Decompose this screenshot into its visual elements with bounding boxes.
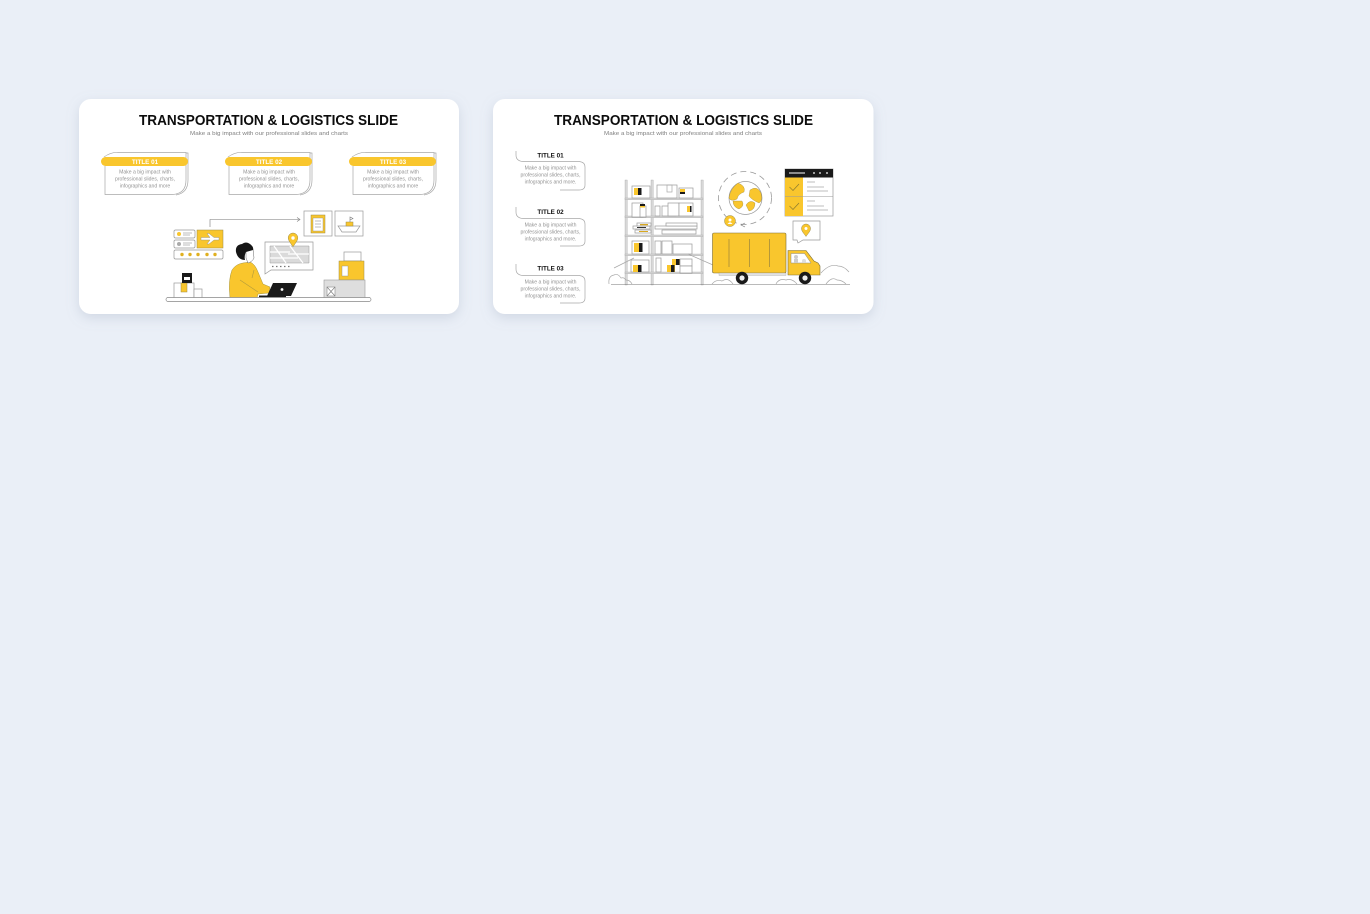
warehouse shelves: [625, 180, 703, 285]
item: title 01: [516, 151, 585, 190]
panel: slide 2: [493, 99, 874, 314]
card: title 02: Make a big impact with: [243, 170, 295, 176]
ground and bushes: [609, 254, 850, 284]
globe: [718, 172, 772, 224]
icon: user badge: [724, 216, 745, 227]
card: title 03: Make a big impact with: [367, 170, 419, 176]
laptop: [259, 283, 297, 297]
heading: slide 1 title: TRANSPORTATION & LOGISTICS SLIDE: [139, 113, 398, 129]
card: title 03: infographics and more: [368, 184, 418, 190]
arrow: connector to documents: [210, 218, 300, 227]
card: title 01: [101, 152, 188, 195]
icon: cargo ship: [335, 211, 363, 236]
item: title 03: TITLE 03: [537, 266, 564, 272]
item: title 01: TITLE 01: [537, 152, 564, 160]
item: title 02: [516, 207, 585, 246]
illustration: person at desk with logistics icons: [166, 211, 371, 302]
card: title 01: professional slides, charts,: [115, 176, 175, 182]
icon: airplane tile: [197, 230, 223, 248]
card: title 03: professional slides, charts,: [363, 176, 423, 182]
shelf boxes: [631, 185, 697, 273]
card: title 01: Make a big impact with: [119, 170, 171, 176]
icon: location pin: [288, 233, 298, 247]
item: title 03: [516, 264, 585, 303]
card: title 02: TITLE 02: [256, 159, 283, 166]
item: title 01: infographics and more.: [525, 180, 576, 186]
shelf frame: [625, 180, 703, 285]
card: title 01: infographics and more: [120, 184, 170, 190]
checklist window: [785, 169, 833, 216]
icon: clipboard: [304, 211, 332, 236]
item: title 02: Make a big impact with: [525, 222, 577, 228]
item: title 02: professional slides, charts,: [520, 230, 581, 236]
slide 2 subtitle: Make a big impact with our professional slides and charts: [604, 131, 762, 137]
card: title 01: TITLE 01: [132, 159, 159, 166]
delivery truck: [712, 233, 820, 284]
item: title 03: infographics and more.: [525, 294, 576, 300]
heading: slide 2 title: TRANSPORTATION & LOGISTICS SLIDE: [554, 113, 813, 129]
item: title 03: professional slides, charts,: [520, 286, 581, 292]
person: [229, 242, 270, 298]
slide 1 subtitle: Make a big impact with our professional slides and charts: [190, 131, 348, 137]
item: title 02: TITLE 02: [537, 209, 564, 216]
item: title 02: infographics and more.: [525, 236, 576, 242]
item: title 03: Make a big impact with: [525, 280, 577, 286]
form: list rows: [174, 230, 223, 259]
card: title 03: TITLE 03: [380, 159, 407, 166]
card: title 03: [349, 152, 436, 195]
desk: [166, 298, 371, 302]
pin bubble: [793, 221, 820, 243]
package stack right: [324, 252, 365, 298]
package stack left: [174, 273, 202, 298]
map bubble: [265, 233, 313, 274]
item: title 01: Make a big impact with: [525, 166, 577, 172]
truck cab: [788, 250, 820, 275]
card: title 02: professional slides, charts,: [239, 176, 299, 182]
truck cargo: [712, 233, 786, 273]
truck wheels: [736, 272, 748, 284]
card: title 02: [225, 152, 312, 195]
card: title 02: infographics and more: [244, 184, 294, 190]
illustration: warehouse and truck: [609, 169, 850, 285]
item: title 01: professional slides, charts,: [520, 172, 581, 178]
panel: slide 1: [79, 99, 459, 314]
